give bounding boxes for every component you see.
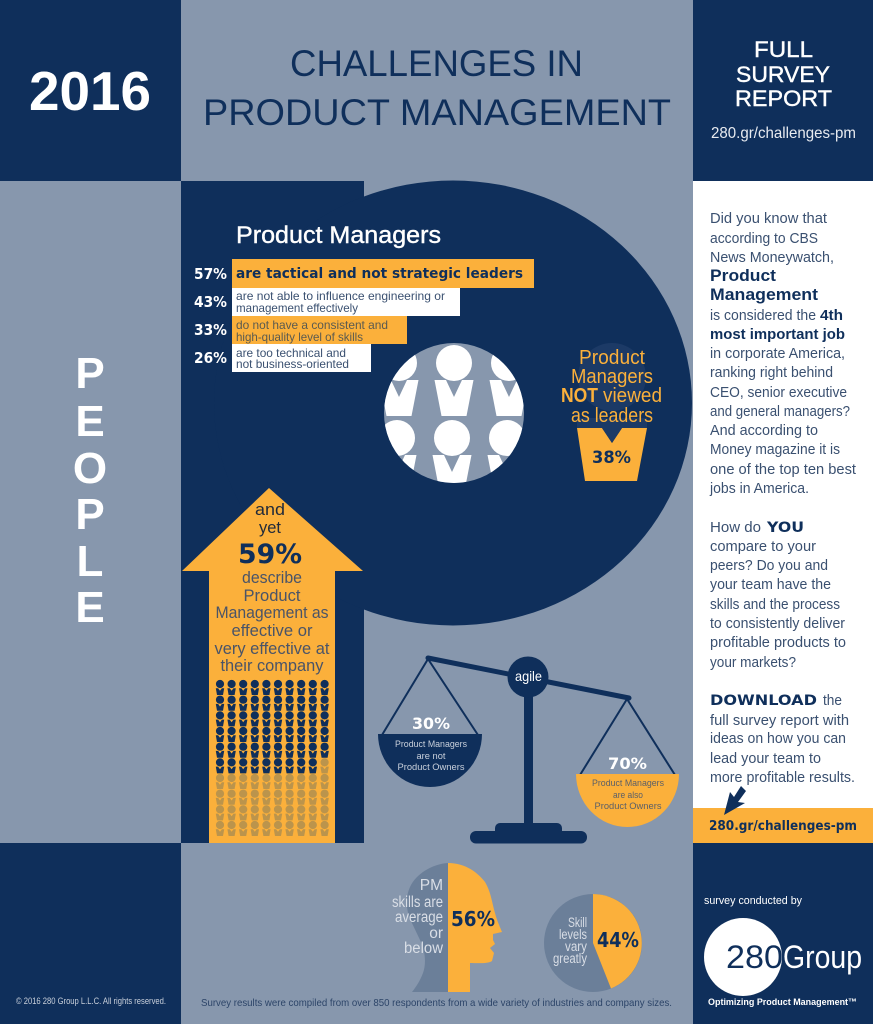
- head chart: PM skills 56%: PM: [420, 877, 443, 894]
- left pan: 30%: Product Owners: [398, 762, 465, 773]
- pie chart: skill levels 44%: [544, 894, 642, 992]
- right panel: body copy: ranking right behind: [710, 364, 833, 381]
- download link bar: 280.gr/challenges-pm: [709, 819, 857, 834]
- right panel: body copy: full survey report with: [710, 712, 849, 729]
- right panel: body copy: compare to your: [710, 538, 816, 555]
- callout text: viewed: [603, 385, 662, 407]
- head chart: PM skills 56%: average: [395, 909, 443, 926]
- footer panel: 280 Group logo: [693, 843, 873, 1024]
- callout text: NOT: [561, 385, 598, 407]
- right pan: 70%: [576, 699, 679, 827]
- right panel: body copy: peers? Do you and: [710, 557, 828, 574]
- icon: faint person: [577, 343, 647, 481]
- title: [203, 43, 671, 133]
- bar 26%: are too technical and: [236, 346, 346, 360]
- bar 33%: 33%: [194, 321, 227, 339]
- right panel: body copy: Product: [710, 266, 776, 285]
- arrow text: yet: [259, 519, 281, 537]
- scale structure: [428, 656, 629, 844]
- scale label: agile: [515, 668, 542, 684]
- bar 26%: not business-oriented: [236, 357, 349, 371]
- right panel: body copy: skills and the process: [710, 596, 840, 613]
- side label: people: E: [75, 583, 105, 632]
- left pan: 30%: 30%: [412, 714, 450, 733]
- title: CHALLENGES IN: [290, 43, 583, 84]
- callout text: as leaders: [571, 405, 653, 427]
- callout value: 38%: [592, 448, 631, 468]
- right panel: body copy: more profitable results.: [710, 769, 855, 786]
- head chart: PM skills 56%: skills are: [392, 894, 443, 911]
- pie chart: skill levels 44%: greatly: [553, 951, 587, 966]
- logo mark: [704, 918, 862, 996]
- side label: people: O: [73, 444, 107, 493]
- title: PRODUCT MANAGEMENT: [203, 92, 671, 133]
- right panel: body copy: your markets?: [710, 654, 796, 671]
- bar 33%: [194, 316, 407, 344]
- arrow text: Product: [244, 587, 301, 605]
- bar 57%: 57%: [194, 265, 227, 283]
- right panel: body copy: News Moneywatch,: [710, 249, 834, 266]
- bar chart: product manager statements: [194, 259, 534, 372]
- pie chart: skill levels 44%: Skill: [568, 915, 587, 930]
- bar 33%: do not have a consistent and: [236, 318, 388, 332]
- pie chart: skill levels 44%: 44%: [597, 928, 639, 952]
- arrow text: their company: [220, 657, 324, 675]
- side label: people: E: [75, 397, 105, 446]
- left pan: 30%: are not: [416, 751, 446, 762]
- report link: 280.gr/challenges-pm: [711, 125, 856, 142]
- head chart: PM skills 56%: or: [429, 925, 443, 942]
- right panel: body copy: ideas on how you can: [710, 730, 846, 747]
- right panel: body copy: Management: [710, 285, 818, 304]
- side label: people: [73, 349, 107, 632]
- head chart: PM skills 56%: 56%: [451, 907, 495, 931]
- survey note: Survey results were compiled from over 850 respondents from a wide variety of industries and company sizes.: [201, 997, 672, 1009]
- heading: product managers: Product Managers: [236, 222, 441, 249]
- navy circle panel: [181, 180, 692, 843]
- bar 43%: management effectively: [236, 301, 358, 315]
- pie chart: skill levels 44%: levels: [559, 927, 587, 942]
- pictogram: 59 of 100 people: [216, 680, 329, 836]
- head chart: PM skills 56%: below: [404, 940, 444, 957]
- callout: not viewed as leaders: [561, 343, 662, 481]
- arrow text: describe: [242, 569, 302, 587]
- balance scale: [378, 656, 679, 844]
- year text: 2016: [29, 60, 151, 122]
- survey credit: survey conducted by: [704, 895, 802, 907]
- arrow text: very effective at: [214, 640, 330, 658]
- up arrow panel: [182, 488, 363, 843]
- icon: circle of people: [384, 343, 524, 483]
- left pan: 30%: Product Managers: [395, 739, 467, 750]
- header panel: year: [0, 0, 181, 181]
- right panel: body copy: is considered the: [710, 307, 816, 324]
- right panel: body copy: one of the top ten best: [710, 461, 857, 478]
- tagline: Optimizing Product Management™: [708, 997, 857, 1008]
- right panel: body copy: Did you know that: [710, 210, 828, 227]
- head chart: PM skills 56%: [392, 863, 502, 992]
- icon: download arrow: [724, 786, 746, 815]
- side label: people: L: [77, 537, 103, 586]
- right pan: 70%: Product Owners: [594, 801, 662, 812]
- right panel: body copy: [693, 181, 873, 808]
- footer panel: copyright: © 2016 280 Group L.L.C. All rights reserved.: [16, 996, 166, 1006]
- bar 26%: 26%: [194, 349, 227, 367]
- bar 43%: are not able to influence engineering or: [236, 289, 445, 303]
- right pan: 70%: are also: [613, 790, 643, 801]
- bar 43%: 43%: [194, 293, 227, 311]
- header panel: full survey report: [693, 0, 873, 181]
- bar 33%: high-quality level of skills: [236, 330, 363, 344]
- report heading: FULL: [754, 37, 813, 62]
- logo mark: 280: [726, 939, 783, 975]
- arrow text: and: [255, 501, 285, 519]
- callout text: [561, 347, 662, 427]
- footer panel: copyright: [0, 843, 181, 1024]
- bar 43%: [194, 288, 460, 316]
- right panel: body copy: in corporate America,: [710, 345, 845, 362]
- arrow text: effective or: [232, 622, 313, 640]
- bar 57%: [194, 259, 534, 288]
- right panel: body copy: to consistently deliver: [710, 615, 845, 632]
- logo mark: Group: [783, 939, 862, 975]
- right panel: body copy: 4th: [820, 307, 843, 324]
- download link bar: [693, 808, 873, 843]
- right panel: body copy: YOU: [766, 520, 804, 536]
- right panel: body copy: profitable products to: [710, 634, 846, 651]
- pie chart: skill levels 44%: vary: [565, 939, 587, 954]
- right panel: body copy: Money magazine it is: [710, 441, 840, 458]
- report heading: [735, 37, 832, 111]
- callout text: Product: [579, 347, 645, 369]
- report heading: REPORT: [735, 86, 832, 111]
- callout text: Managers: [571, 366, 653, 388]
- right panel: body copy: And according to: [710, 422, 818, 439]
- right panel: body copy: jobs in America.: [709, 480, 809, 497]
- left pan: 30%: [378, 659, 482, 787]
- right panel: body copy: lead your team to: [710, 750, 821, 767]
- arrow text: 59%: [238, 539, 302, 570]
- side label: people: P: [75, 349, 105, 398]
- right panel: body copy: CEO, senior executive: [710, 384, 847, 401]
- right panel: body copy: and general managers?: [710, 403, 850, 420]
- right pan: 70%: 70%: [608, 754, 647, 773]
- right panel: body copy: DOWNLOAD: [710, 693, 817, 709]
- arrow text: [214, 501, 330, 675]
- right pan: 70%: Product Managers: [592, 778, 664, 789]
- right panel: body copy: your team have the: [710, 576, 831, 593]
- right panel: body copy: according to CBS: [710, 230, 818, 247]
- report heading: SURVEY: [736, 62, 830, 87]
- right panel: body copy: the: [823, 692, 842, 709]
- bar 57%: are tactical and not strategic leaders: [236, 266, 523, 282]
- bar 26%: [194, 344, 371, 372]
- arrow text: Management as: [216, 604, 328, 622]
- side label: people: P: [75, 490, 105, 539]
- right panel: body copy: most important job: [710, 326, 845, 343]
- right panel: body copy: How do: [710, 519, 761, 536]
